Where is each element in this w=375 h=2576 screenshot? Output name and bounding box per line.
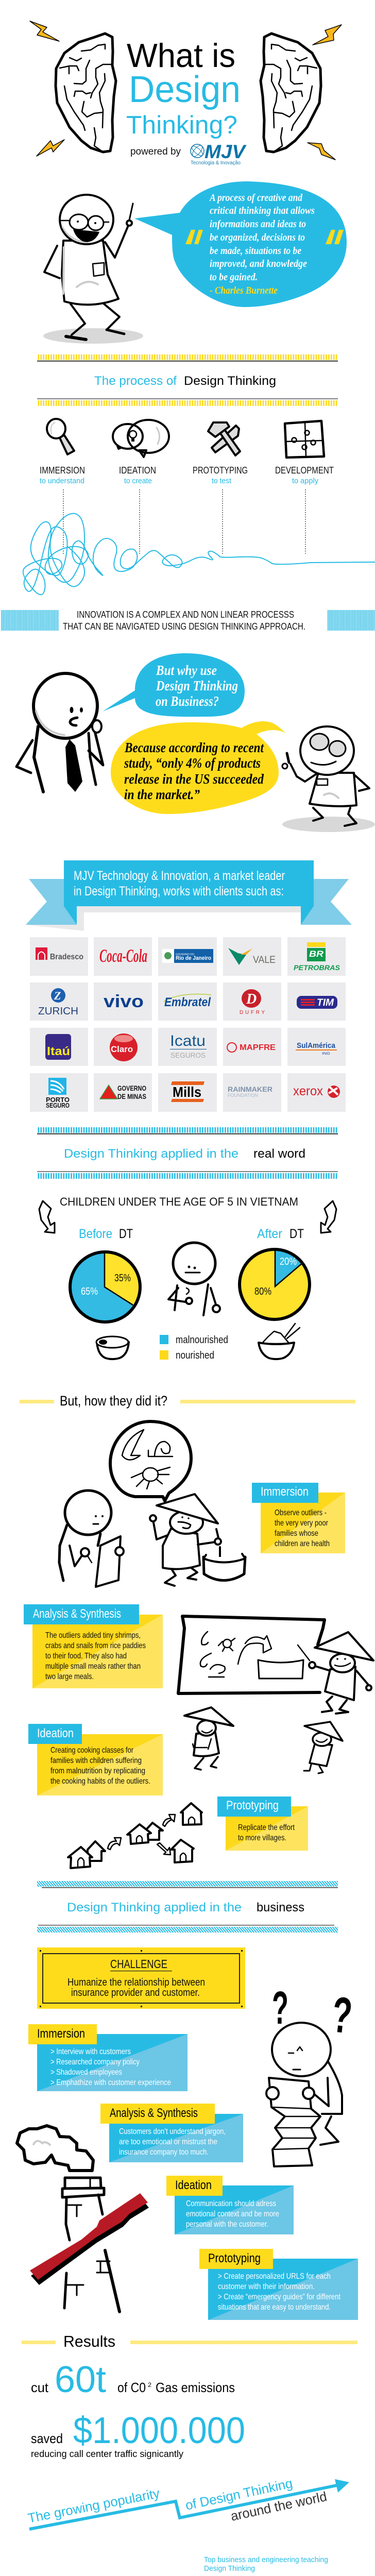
stat: $1.000.000 saved: $1.000.000: [73, 2410, 245, 2451]
logo: Petrobras: [294, 942, 340, 972]
logo: TIM: TIM: [317, 997, 334, 1008]
quote bubble: [134, 181, 347, 307]
stat: 60t CO2: 60t: [55, 2359, 106, 2400]
logo: Icatu: [170, 1032, 207, 1059]
panel: ideation note: the cooking habits of the outliers.: [50, 1777, 150, 1786]
callout: innovation statement: THAT CAN BE NAVIGATED USING DESIGN THINKING APPROACH.: [63, 621, 305, 632]
logo: Vale: VALE: [253, 955, 276, 965]
logo: Rio de Janeiro: GOVERNO DO: [176, 953, 195, 956]
icon: question marks: [272, 1982, 355, 2044]
icon: hammer and pencil: [208, 422, 240, 455]
panel: business prototyping: customer with their information.: [218, 2282, 315, 2291]
icon: quote marks: [185, 230, 344, 244]
logo: TIM: [297, 996, 337, 1009]
panel: immersion note: families whose: [275, 1529, 318, 1538]
logo: Rainmaker: FOUNDATION: [228, 1093, 258, 1098]
logo: Icatu: SEGUROS: [171, 1051, 206, 1059]
heading: The process of Design Thinking: [37, 354, 338, 406]
character: professor pointing: [43, 195, 143, 344]
arrow: left curved: [39, 1201, 55, 1233]
stat: 60t CO2: [31, 2359, 235, 2400]
bubble: but why use design thinking: But why use: [156, 663, 217, 678]
label: ideation: to create: [124, 477, 152, 485]
panel: business analysis: Analysis & Synthesis: [110, 2106, 198, 2120]
panel: immersion note: Observe outliers -: [275, 1509, 327, 1517]
character: child: [168, 1243, 220, 1315]
panel: business immersion: [28, 2024, 187, 2091]
panel: prototyping note: [217, 1797, 308, 1851]
panel: business prototyping: Prototyping: [208, 2251, 261, 2265]
icon: lightning bolts: [30, 21, 342, 160]
logo: Zurich: [38, 988, 78, 1017]
logo: Dufry: D: [246, 991, 257, 1007]
legend: malnourished: [176, 1334, 228, 1346]
icon: right brain: [261, 33, 321, 152]
logo: MJV: MJV: [204, 141, 247, 162]
panel: immersion note: children are health: [275, 1539, 330, 1548]
quote bubble: to be gained.: [210, 272, 258, 283]
text: before DT: Before: [79, 1227, 112, 1241]
panel: client ribbon: in Design Thinking, works with clients such as:: [74, 884, 284, 899]
character: mother with magnifier: [59, 1490, 124, 1587]
icon: red slash: [30, 2193, 149, 2285]
stat: 60t CO2: Gas emissions: [156, 2380, 235, 2395]
label: immersion: IMMERSION: [40, 465, 85, 476]
logo: Rio de Janeiro: [162, 949, 213, 963]
icon: question marks: ?: [272, 1982, 288, 2034]
logo: Porto Seguro: [46, 1078, 70, 1109]
logo: Petrobras: PETROBRAS: [294, 963, 340, 972]
label: development: [275, 465, 334, 485]
stat: 60t CO2: cut: [31, 2380, 49, 2395]
logo: Governo de Minas: GOVERNO: [117, 1084, 146, 1092]
icon: smoke cloud: [17, 2126, 93, 2171]
logo: Dufry: DUFRY: [240, 1010, 265, 1015]
logo: SulAmerica: SulAmérica: [297, 1041, 336, 1050]
bubble: but why use design thinking: on Business?: [156, 693, 219, 709]
text: after DT: [257, 1227, 304, 1241]
heading: Design Thinking applied in the real word: real word: [253, 1147, 305, 1161]
panel: analysis and synthesis note: crabs and snails from rice paddies: [45, 1641, 146, 1650]
character: professor right: [282, 726, 375, 832]
callout: innovation statement: INNOVATION IS A COMPLEX AND NON LINEAR PROCESSS: [77, 609, 294, 620]
logo: Porto Seguro: PORTO: [46, 1096, 70, 1104]
panel: business immersion: > Interview with customers: [50, 2047, 131, 2056]
heading: Design Thinking applied in the business: [37, 1881, 338, 1933]
panel: client ribbon: MJV Technology & Innovation, a market leader: [74, 869, 285, 883]
panel: business prototyping: > Create personalized URLS for each: [218, 2272, 331, 2281]
list: top schools: [204, 2555, 330, 2576]
stat: $1.000.000 saved: [31, 2410, 245, 2459]
quote bubble: - Charles Burnette: [210, 285, 278, 296]
panel: business analysis: Customers don’t understand jargon,: [119, 2127, 226, 2136]
logo: Rainmaker: [228, 1085, 272, 1098]
panel: analysis and synthesis note: Analysis & Synthesis: [33, 1607, 121, 1621]
logo: Zurich: Z: [54, 989, 61, 1002]
chart: after pie: 20%: [280, 1256, 297, 1267]
text: after DT: After: [257, 1227, 282, 1241]
title: Thinking?: Thinking?: [126, 111, 237, 139]
header: title and brains: [30, 21, 342, 166]
arrow: growing popularity: [26, 2475, 349, 2529]
panel: business prototyping: situations that are easy to understand.: [218, 2303, 331, 2312]
panel: ideation note: from malnutrition by replicating: [50, 1767, 145, 1775]
logo: Claro: Claro: [111, 1044, 133, 1054]
logo: SulAmerica: ING: [322, 1052, 330, 1056]
text: chart title: CHILDREN UNDER THE AGE OF 5 IN VIETNAM: [60, 1195, 298, 1208]
logo: Porto Seguro: SEGURO: [46, 1101, 70, 1109]
panel: immersion note: the very very poor: [275, 1519, 329, 1528]
character: villager left: [184, 1707, 233, 1770]
logo: Governo de Minas: DE MINAS: [117, 1092, 146, 1100]
panel: business immersion: Immersion: [37, 2027, 85, 2041]
chart: before pie: 65%: [81, 1286, 98, 1297]
quote bubble: critical thinking that allows: [210, 205, 315, 216]
character: businessman: [16, 673, 103, 792]
panel: business ideation: Ideation: [175, 2178, 212, 2192]
logo: Itau: [45, 1034, 71, 1060]
panel: prototyping note: Prototyping: [226, 1799, 279, 1812]
callout: innovation statement: [1, 609, 375, 632]
logo: Xerox: xerox: [293, 1084, 323, 1098]
illustration: outliers scene: [24, 1421, 373, 1868]
label: development: to apply: [292, 477, 318, 485]
icon: question marks: ?: [329, 1986, 355, 2044]
heading: Results: Results: [63, 2332, 115, 2350]
logo: Rainmaker: RAINMAKER: [228, 1085, 272, 1093]
panel: ideation note: [28, 1724, 163, 1795]
legend: nourished: [176, 1350, 214, 1361]
panel: analysis and synthesis note: [24, 1604, 163, 1688]
bubble: but why use design thinking: Design Thinking: [156, 678, 238, 693]
bubble: because according to recent study: Because according to recent: [124, 740, 264, 755]
quote bubble: be made, situations to be: [210, 245, 301, 257]
logo: Embratel: Embratel: [164, 995, 211, 1009]
bubble: because according to recent study: [111, 721, 286, 814]
text: before DT: DT: [119, 1227, 133, 1241]
icon: houses and arrows: [68, 1803, 202, 1868]
heading: Design Thinking applied in the real word: [37, 1127, 338, 1179]
logo: Governo de Minas: [100, 1084, 146, 1100]
logo: Itau: Itaú: [47, 1044, 70, 1058]
icon: left brain: [56, 33, 116, 152]
text: powered by: powered by: [130, 146, 181, 157]
label: development: DEVELOPMENT: [275, 465, 334, 476]
panel: business ideation: personal with the customer.: [186, 2220, 268, 2229]
logo: Zurich: ZURICH: [38, 1006, 78, 1017]
panel: challenge: insurance provider and customer.: [71, 1987, 200, 1998]
icon: speech bubbles with bulb: [113, 420, 169, 457]
panel: analysis and synthesis note: multiple small meals rather than: [45, 1662, 141, 1671]
character: confused reader with long document: [266, 1982, 355, 2166]
arrow: right curved: [321, 1201, 336, 1233]
panel: analysis and synthesis note: to their food. They also had: [45, 1652, 127, 1660]
bubble: because according to recent study: in the market.”: [124, 787, 200, 802]
bubble: because according to recent study: release in the US succeeded: [124, 771, 264, 787]
label: ideation: IDEATION: [119, 465, 156, 476]
panel: prototyping note: to more villages.: [238, 1834, 286, 1842]
arrow: growing popularity: of Design Thinking: [184, 2475, 294, 2513]
chart: before pie: 35%: [114, 1273, 131, 1284]
panel: analysis and synthesis note: The outliers added tiny shrimps,: [45, 1631, 141, 1640]
logo: Coca-Cola: Coca-Cola: [99, 945, 147, 966]
panel: business prototyping: [199, 2249, 358, 2320]
label: ideation: [119, 465, 156, 485]
stat: 60t CO2: 2: [148, 2381, 151, 2388]
logo: Vale: [228, 948, 276, 965]
logo: Petrobras: BR: [309, 949, 324, 959]
stat: $1.000.000 saved: reducing call center traffic signicantly: [31, 2449, 183, 2459]
chart: after pie: 80%: [254, 1286, 271, 1297]
panel: ideation note: families with children suffering: [50, 1756, 142, 1765]
panel: immersion note: Immersion: [261, 1485, 309, 1499]
logo: Bradesco: Bradesco: [50, 953, 83, 961]
panel: ideation note: Creating cooking classes for: [50, 1746, 134, 1755]
character: villager with pot: [150, 1494, 245, 1586]
panel: ideation note: Ideation: [37, 1726, 74, 1740]
arrow: growing popularity: The growing popularity: [26, 2485, 161, 2526]
panel: immersion note: [252, 1483, 345, 1553]
logo: Rio de Janeiro: Rio de Janeiro: [176, 955, 211, 961]
arrow: growing popularity: around the world: [229, 2488, 328, 2524]
bubble: but why use design thinking: [103, 653, 245, 717]
icon: puzzle: [285, 421, 324, 457]
logo: Icatu: Icatu: [170, 1032, 206, 1049]
icon: thought bubble: [110, 1421, 191, 1501]
heading: The process of Design Thinking: The process of: [94, 374, 177, 388]
list: top schools: Top business and engineering teaching: [204, 2555, 328, 2564]
logo: MJV: [191, 141, 247, 166]
icon: magnifier: [47, 419, 74, 454]
bubble: because according to recent study: study, “only 4% of products: [124, 755, 261, 771]
quote bubble: be organized, decisions to: [210, 232, 305, 243]
chart: before pie: [70, 1252, 140, 1322]
heading: But, how they did it?: [20, 1393, 355, 1409]
panel: business ideation: Communication should adress: [186, 2199, 276, 2208]
panel: results stats: [31, 2359, 245, 2459]
legend: [160, 1334, 228, 1361]
panel: analysis and synthesis note: two large meals.: [45, 1672, 94, 1681]
logo: Vivo: vivo: [104, 992, 144, 1011]
logo: SulAmerica: [296, 1041, 337, 1056]
quote bubble: improved, and knowledge: [210, 258, 307, 269]
illustration: whiteboard and teacher: [178, 1616, 373, 1714]
panel: business ideation: [166, 2176, 294, 2234]
panel: four process steps: [40, 419, 334, 485]
logo: Xerox: [293, 1084, 340, 1098]
panel: challenge: Humanize the relationship between: [67, 1977, 205, 1988]
panel: business analysis: insurance company too much.: [119, 2148, 209, 2157]
logo: Dufry: [240, 989, 265, 1015]
logo: Claro: [110, 1033, 138, 1061]
panel: business immersion: > Researched company policy: [50, 2058, 140, 2066]
label: immersion: to understand: [40, 477, 84, 485]
panel: business analysis: are too emotional or mistrust the: [119, 2138, 217, 2146]
logo: Bradesco: [36, 947, 83, 961]
text: after DT: DT: [289, 1227, 304, 1241]
logo: Mapfre: MAPFRE: [240, 1043, 276, 1052]
logo: MJV: Tecnologia & Inovação: [191, 160, 241, 166]
icon: empty bowl: [96, 1336, 129, 1359]
panel: challenge: [37, 1947, 245, 2009]
quote bubble: A process of creative and: [209, 192, 303, 204]
stat: 60t CO2: of C0: [117, 2380, 146, 2395]
title: Design: Design: [129, 69, 241, 110]
panel: business prototyping: > Create “emergency guides” for different: [218, 2293, 340, 2301]
heading: Design Thinking applied in the real word: Design Thinking applied in the: [64, 1147, 238, 1161]
panel: business ideation: emotional context and be more: [186, 2210, 279, 2218]
character: villager right: [304, 1722, 343, 1773]
panel: business analysis: [100, 2104, 243, 2162]
label: prototyping: to test: [212, 477, 232, 485]
heading: Design Thinking applied in the business: business: [257, 1901, 304, 1914]
heading: But, how they did it?: But, how they did it?: [60, 1393, 167, 1409]
chart: after pie: [240, 1249, 310, 1319]
title: What is: What is: [127, 37, 235, 74]
quote bubble: informations and ideas to: [210, 218, 306, 230]
illustration: smokestack crossed out: [17, 2126, 149, 2312]
heading: The process of Design Thinking: Design Thinking: [184, 374, 276, 388]
panel: business immersion: > Emphathize with customer experience: [50, 2078, 171, 2087]
panel: challenge: CHALLENGE: [110, 1957, 167, 1971]
chart: design squiggle: [23, 514, 375, 595]
panel: business immersion: > Shadowed employees: [50, 2068, 122, 2077]
heading: Results: [22, 2332, 357, 2350]
logo: Mapfre: [227, 1043, 276, 1052]
panel: children under 5 in Vietnam: [39, 1195, 336, 1361]
list: top schools: Design Thinking: [204, 2564, 255, 2573]
panel: client ribbon: [26, 860, 352, 931]
logo: Mills: Mills: [173, 1084, 201, 1100]
panel: prototyping note: Replicate the effort: [238, 1823, 295, 1832]
heading: Design Thinking applied in the business: Design Thinking applied in the: [67, 1901, 242, 1914]
label: prototyping: [193, 465, 248, 485]
label: immersion: [40, 465, 85, 485]
icon: rice bowl: [259, 1324, 300, 1359]
stat: $1.000.000 saved: saved: [31, 2431, 63, 2446]
label: prototyping: PROTOTYPING: [193, 465, 248, 476]
panel: client logos grid: [30, 937, 346, 1112]
